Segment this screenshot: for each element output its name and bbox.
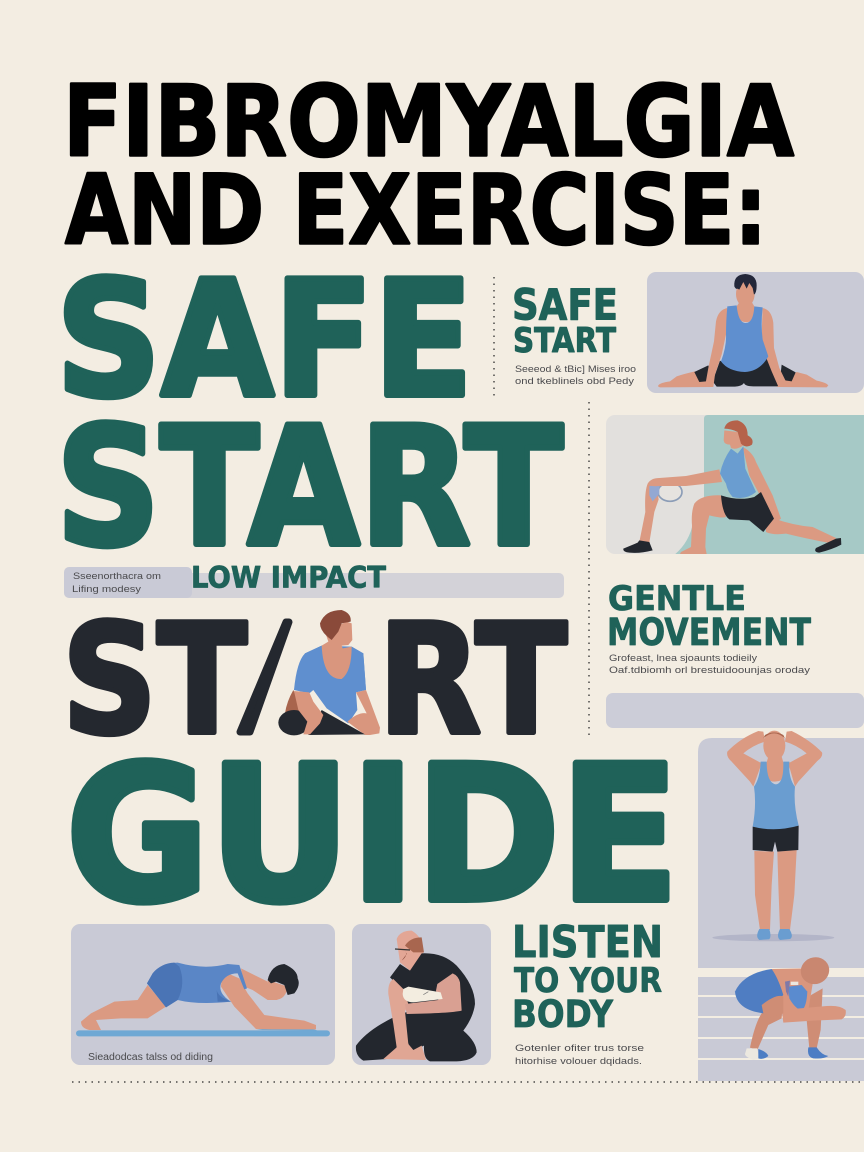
- panel: kneeling figure: [352, 924, 491, 1065]
- icon: standing figure: [712, 731, 834, 941]
- heading: start green: START: [56, 392, 563, 583]
- panel: seated straddle stretch: [647, 272, 864, 393]
- listen to your body text block: hitorhise volouer dqidads.: [515, 1056, 642, 1067]
- icon: bending figure: [735, 953, 846, 1060]
- gentle movement text block: GENTLE: [608, 579, 746, 619]
- panel: standing and bending figures: [698, 731, 864, 1081]
- caption: Sieadodcas talss od diding: [88, 1052, 213, 1063]
- listen to your body text block: BODY: [512, 993, 614, 1036]
- safe start text block: SAFE: [512, 282, 618, 330]
- heading: safe: SAFE: [56, 246, 473, 433]
- heading: start dark with figure: RT: [378, 592, 567, 768]
- icon: kneeling figure: [356, 931, 477, 1061]
- gentle movement text block: Grofeast, lnea sjoaunts todieily: [609, 653, 757, 664]
- safe start text block: Seeeod & tBic] Mises iroo: [515, 364, 636, 375]
- listen to your body text block: LISTEN: [512, 917, 663, 968]
- gentle movement text block: Oaf.tdbiomh orl brestuidoounjas oroday: [609, 665, 810, 676]
- gentle movement text block: [607, 579, 812, 676]
- low impact bar: Sseenorthacra om: [73, 571, 161, 582]
- title: [63, 66, 794, 266]
- gentle movement text block: MOVEMENT: [607, 611, 812, 654]
- panel: plank stretch: [71, 924, 335, 1065]
- heading: start dark with figure: [62, 592, 567, 768]
- listen to your body text block: TO YOUR: [514, 961, 662, 1001]
- panel: lunge stretch: [606, 415, 864, 554]
- safe start text block: [512, 282, 636, 387]
- heading: start dark with figure: ST: [62, 592, 247, 768]
- listen to your body text block: Gotenler ofiter trus torse: [515, 1043, 644, 1054]
- icon: plank figure: [76, 963, 330, 1036]
- listen to your body text block: [512, 917, 663, 1067]
- low impact bar: LOW IMPACT: [191, 560, 386, 594]
- heading: guide: GUIDE: [66, 726, 679, 944]
- low impact bar: [64, 560, 564, 598]
- icon: seated figure: [278, 610, 380, 735]
- safe start text block: ond tkeblinels obd Pedy: [515, 376, 634, 387]
- blank bar: [606, 693, 864, 728]
- icon: straddle figure: [658, 274, 828, 387]
- icon: lunge figure: [623, 415, 864, 554]
- safe start text block: START: [513, 321, 617, 361]
- low impact bar: Lifing modesy: [72, 584, 141, 595]
